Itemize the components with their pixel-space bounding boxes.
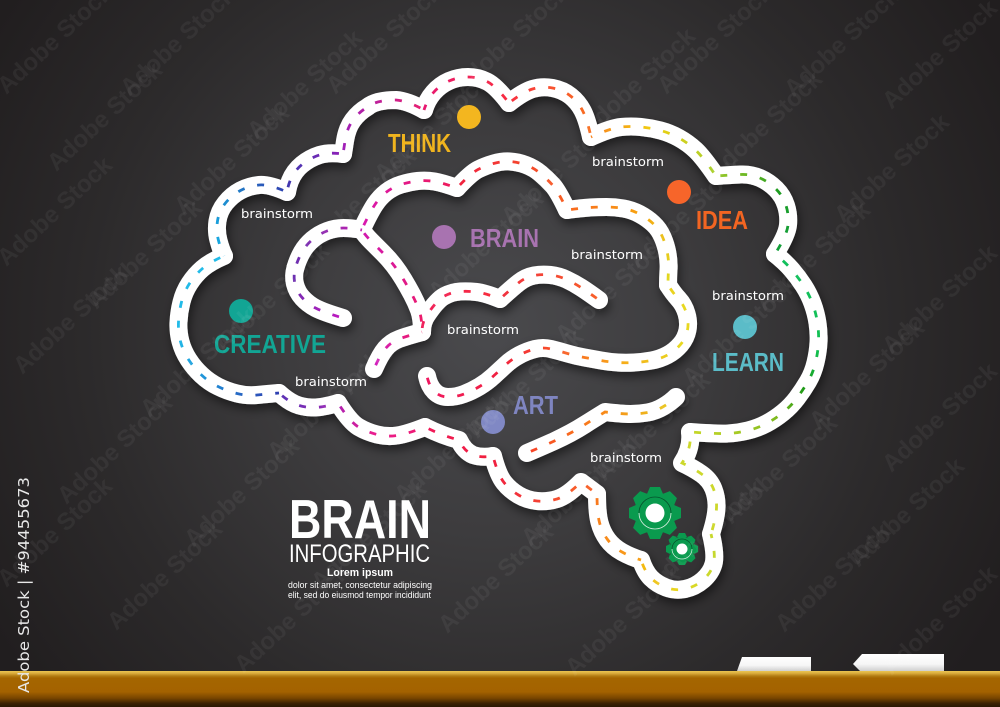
stock watermark pattern: Adobe Stock bbox=[242, 24, 368, 144]
label: art: ART bbox=[513, 390, 558, 420]
label: think bbox=[388, 105, 481, 158]
stock watermark pattern: Adobe Stock bbox=[52, 389, 178, 509]
stock watermark pattern: Adobe Stock bbox=[590, 366, 716, 486]
brainstorm captions: brainstorm bbox=[590, 450, 662, 465]
stock watermark pattern: Adobe Stock bbox=[262, 345, 388, 465]
vertical stock caption: Adobe Stock | #94455673 bbox=[15, 477, 33, 693]
label: idea bbox=[667, 180, 748, 235]
stock watermark pattern: Adobe Stock bbox=[8, 259, 134, 379]
stock watermark pattern: Adobe Stock bbox=[623, 153, 749, 273]
label: idea: IDEA bbox=[696, 205, 748, 235]
stock watermark pattern: Adobe Stock bbox=[877, 357, 1000, 477]
stock watermark pattern: Adobe Stock bbox=[702, 65, 828, 185]
stock watermark pattern: Adobe Stock bbox=[229, 558, 355, 678]
stock watermark pattern: Adobe Stock bbox=[829, 108, 955, 228]
brain outline road: white bands bbox=[178, 77, 819, 590]
stock watermark pattern: Adobe Stock bbox=[496, 110, 622, 230]
brainstorm captions bbox=[241, 154, 784, 465]
brainstorm captions: brainstorm bbox=[712, 288, 784, 303]
brainstorm captions: brainstorm bbox=[447, 322, 519, 337]
body text bbox=[288, 580, 432, 600]
brainstorm captions: brainstorm bbox=[592, 154, 664, 169]
stock watermark pattern: Adobe Stock bbox=[369, 67, 495, 187]
brain outline road: coloured rainbow dashes bbox=[178, 77, 819, 590]
stock watermark pattern: Adobe Stock bbox=[135, 302, 261, 422]
stock watermark pattern: Adobe Stock bbox=[179, 432, 305, 552]
title block bbox=[288, 488, 432, 600]
stock watermark pattern: Adobe Stock bbox=[82, 194, 208, 314]
label: brain: BRAIN bbox=[470, 223, 539, 253]
stock watermark pattern: Adobe Stock bbox=[306, 475, 432, 595]
chalk pieces bbox=[737, 654, 944, 671]
body text: dolor sit amet, consectetur adipiscing bbox=[288, 580, 432, 590]
chalk tray bbox=[0, 671, 1000, 707]
label: think: THINK bbox=[388, 128, 451, 158]
stock watermark pattern: Adobe Stock bbox=[209, 237, 335, 357]
stock watermark pattern: Adobe Stock bbox=[516, 431, 642, 551]
stock watermark pattern: Adobe Stock bbox=[877, 560, 1000, 680]
brainstorm captions: brainstorm bbox=[241, 206, 313, 221]
body text: elit, sed do eiusmod tempor incididunt bbox=[288, 590, 431, 600]
brainstorm captions: brainstorm bbox=[571, 247, 643, 262]
stock watermark pattern: Adobe Stock bbox=[717, 409, 843, 529]
stock watermark pattern: Adobe Stock bbox=[389, 388, 515, 508]
heading: infographic: INFOGRAPHIC bbox=[289, 540, 430, 568]
stock watermark pattern: Adobe Stock bbox=[169, 99, 295, 219]
stock watermark pattern: Adobe Stock bbox=[643, 474, 769, 594]
stock watermark pattern: Adobe Stock bbox=[336, 280, 462, 400]
icon: small gear bbox=[666, 533, 698, 565]
stock watermark pattern: Adobe Stock bbox=[575, 22, 701, 142]
label: brain bbox=[432, 223, 539, 253]
stock watermark pattern: Adobe Stock bbox=[433, 518, 559, 638]
subheading: lorem ipsum: Lorem ipsum bbox=[327, 567, 393, 579]
stock watermark pattern: Adobe Stock bbox=[102, 515, 228, 635]
stock watermark pattern: Adobe Stock bbox=[463, 323, 589, 443]
label: creative: CREATIVE bbox=[214, 329, 326, 359]
stock watermark pattern: Adobe Stock bbox=[844, 452, 970, 572]
stock watermark pattern: Adobe Stock bbox=[296, 142, 422, 262]
heading: brain: BRAIN bbox=[289, 488, 431, 550]
stock watermark pattern: Adobe Stock bbox=[42, 56, 168, 176]
label: learn bbox=[712, 315, 784, 377]
stock watermark pattern: Adobe Stock bbox=[804, 314, 930, 434]
brainstorm captions: brainstorm bbox=[295, 374, 367, 389]
label: learn: LEARN bbox=[712, 347, 784, 377]
stock watermark pattern: Adobe Stock bbox=[550, 228, 676, 348]
stock watermark pattern: Adobe Stock bbox=[750, 196, 876, 316]
stock watermark pattern: Adobe Stock bbox=[770, 517, 896, 637]
stock watermark pattern: Adobe Stock bbox=[877, 239, 1000, 359]
label: creative bbox=[214, 299, 326, 359]
stock watermark pattern: Adobe Stock bbox=[423, 185, 549, 305]
stock watermark pattern: Adobe Stock bbox=[560, 561, 686, 681]
stock watermark pattern: Adobe Stock bbox=[677, 271, 803, 391]
icon: large gear bbox=[629, 487, 681, 539]
label: art bbox=[481, 390, 558, 434]
